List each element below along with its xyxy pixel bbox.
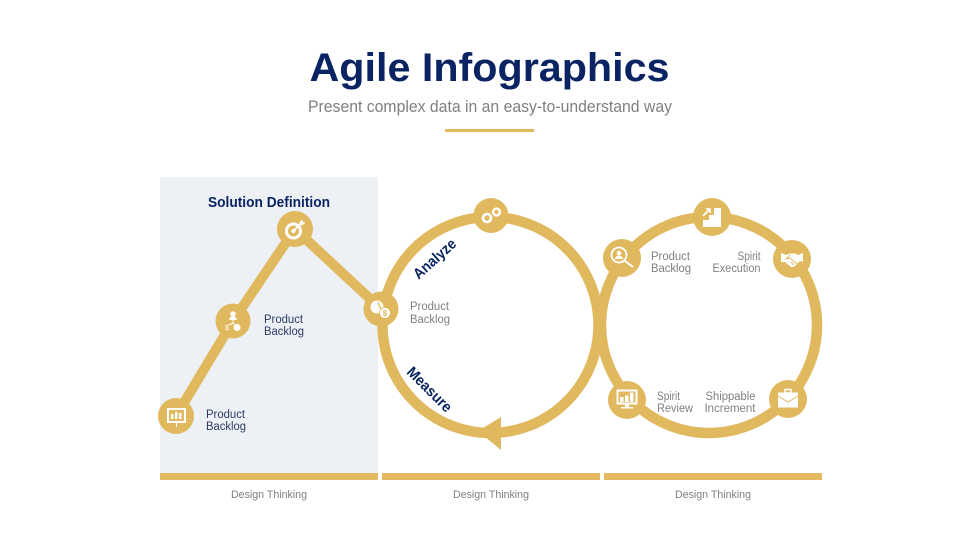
text: product backlog low: Backlog (206, 421, 246, 433)
text: product backlog ring two: Product (651, 251, 691, 263)
text: product backlog ring one: Backlog (410, 314, 450, 326)
icon: search person (603, 239, 641, 277)
text: product backlog ring one: Product (410, 301, 450, 313)
text: product backlog low: Product (206, 409, 246, 421)
text: spirit execution: Spirit (738, 251, 761, 263)
text: product backlog ring two: Backlog (651, 263, 691, 275)
icon: presentation chart (158, 398, 194, 434)
chart: rising and falling line (176, 229, 381, 416)
text: spirit execution: Execution (712, 263, 760, 275)
ring: sprint cycle (601, 217, 817, 433)
ring: analyze and measure cycle (382, 217, 598, 433)
icon: coins: $ (383, 309, 388, 318)
text: product backlog mid: Product (264, 314, 304, 326)
heading: solution definition: Solution Definition (208, 195, 330, 211)
footer label 3: Design Thinking (675, 489, 751, 501)
arrow head (478, 417, 501, 450)
footer bar 2 (382, 473, 600, 480)
icon: stairs (693, 198, 731, 236)
icon: handshake (773, 240, 811, 278)
footer bar 3 (604, 473, 822, 480)
text: shippable increment: Increment (704, 403, 756, 415)
text: shippable increment: Shippable (706, 391, 756, 403)
icon: coins (364, 292, 398, 326)
icon: person and money (216, 304, 250, 338)
text: spirit review: Review (657, 403, 694, 415)
footer label 2: Design Thinking (453, 489, 529, 501)
label: measure: Measure (403, 364, 455, 416)
text: product backlog mid: Backlog (264, 326, 304, 338)
panel: solution definition background (160, 177, 378, 473)
label: analyze: Analyze (410, 235, 460, 283)
icon: monitor chart (608, 381, 646, 419)
icon: briefcase (769, 380, 807, 418)
text: spirit review: Spirit (657, 391, 681, 403)
icon: person and money: $ (225, 325, 229, 332)
title underline (445, 129, 534, 132)
icon: target (277, 211, 313, 247)
subtitle: Present complex data in an easy-to-understand way (308, 98, 673, 116)
footer bar 1 (160, 473, 378, 480)
title: Agile Infographics (310, 46, 670, 90)
footer label 1: Design Thinking (231, 489, 307, 501)
icon: gears (474, 198, 508, 233)
